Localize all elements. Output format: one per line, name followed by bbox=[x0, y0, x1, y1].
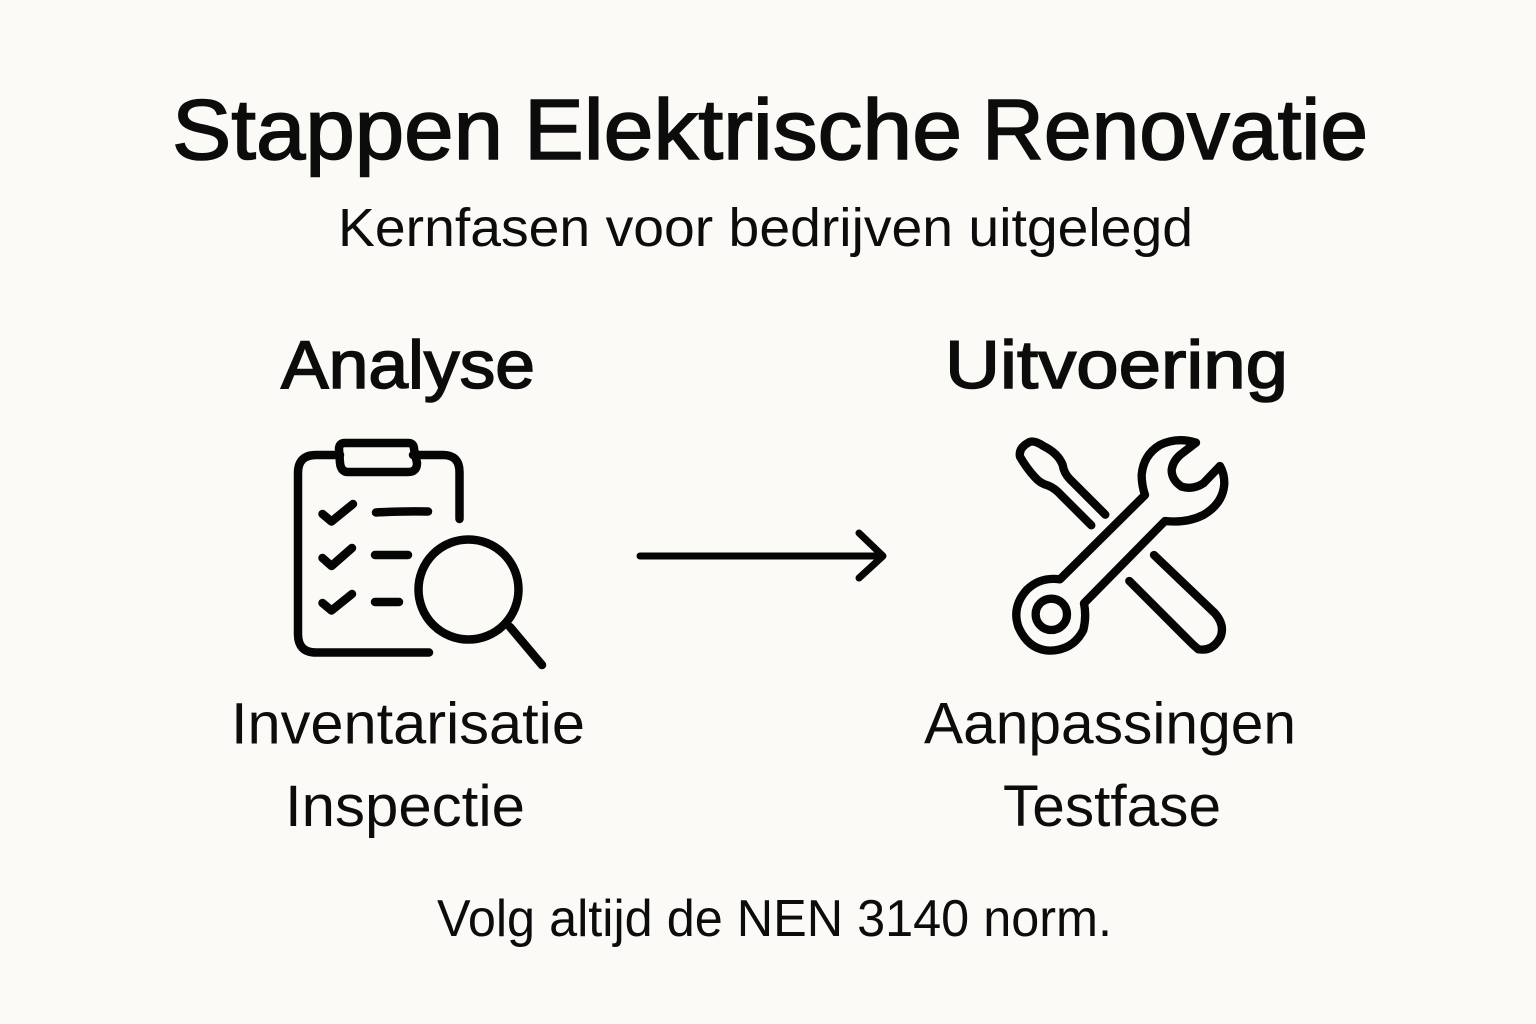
title: Stappen bbox=[172, 83, 503, 178]
label: Aanpassingen: Aanpassingen bbox=[924, 692, 1296, 756]
footer note: Volg altijd de NEN 3140 norm. bbox=[437, 890, 1112, 948]
heading: Analyse: Analyse bbox=[281, 327, 535, 403]
subtitle: Kernfasen voor bedrijven uitgelegd bbox=[338, 198, 1193, 258]
arrow bbox=[640, 533, 883, 578]
heading: Uitvoering: Uitvoering bbox=[945, 327, 1288, 403]
title: Renovatie bbox=[982, 83, 1368, 178]
panel: analyse bbox=[231, 327, 585, 839]
panel: uitvoering bbox=[924, 327, 1296, 839]
label: Inspectie: Inspectie bbox=[285, 774, 525, 839]
label: Inventarisatie: Inventarisatie bbox=[231, 692, 585, 756]
icon: crossed wrench and screwdriver bbox=[1016, 440, 1224, 651]
title: Elektrische bbox=[524, 83, 962, 178]
icon: clipboard with magnifier bbox=[298, 443, 542, 665]
label: Testfase: Testfase bbox=[1003, 774, 1221, 839]
